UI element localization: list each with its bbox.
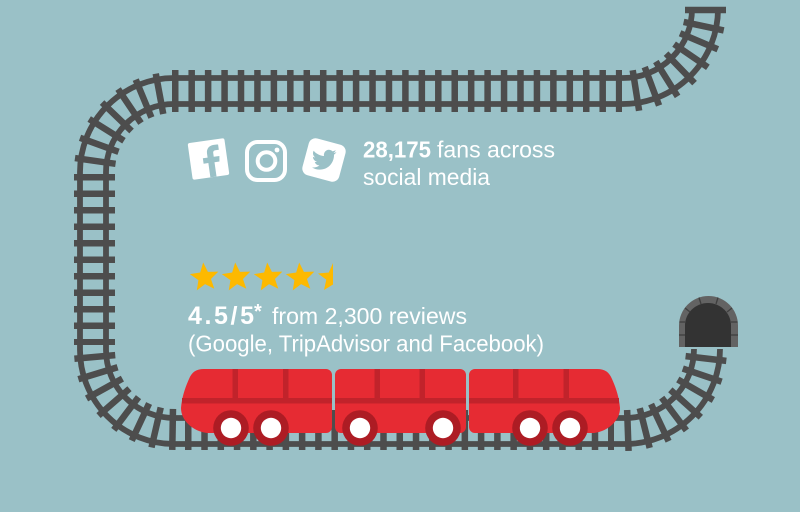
rating text: from 2,300 reviews (272, 303, 467, 329)
rating stars (189, 261, 333, 291)
tunnel (679, 296, 738, 347)
rating text: (Google, TripAdvisor and Facebook) (188, 330, 544, 356)
social media text: 28,175 (363, 136, 431, 162)
icon: instagram (247, 142, 285, 180)
rating text: * (254, 301, 262, 323)
rating text (188, 301, 544, 356)
carriage 3 (469, 369, 620, 446)
carriage 2 (335, 369, 466, 446)
carriage 1 (181, 369, 332, 446)
icon: twitter (301, 137, 347, 183)
railway track (74, 9, 726, 451)
straight sleepers (94, 91, 622, 430)
curved sleepers (74, 10, 726, 451)
social media text: fans across (437, 136, 555, 162)
rating text: 4.5/5 (188, 302, 254, 330)
train (181, 369, 620, 446)
social media text: social media (363, 164, 490, 190)
social media text (363, 136, 555, 190)
rails (80, 9, 720, 444)
icon: facebook (188, 138, 229, 180)
